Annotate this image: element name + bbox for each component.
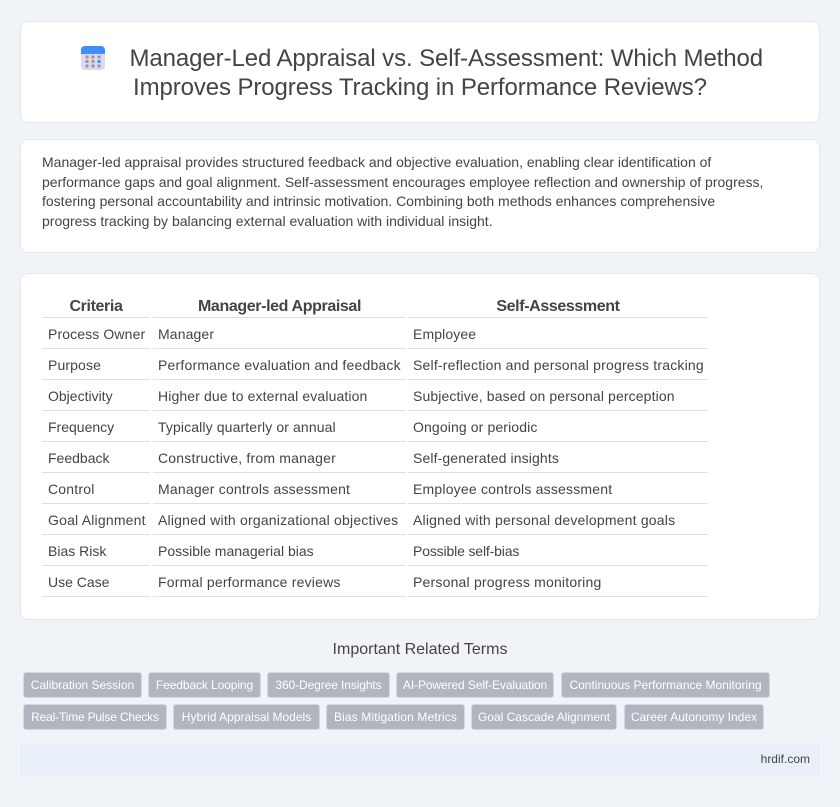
row: Control: Control (48, 481, 95, 497)
row: Purpose: Performance evaluation and feedback (158, 357, 401, 373)
footer bar (20, 743, 820, 777)
row: Objectivity: Subjective, based on personal perception (413, 388, 675, 404)
row: Objectivity: Objectivity (48, 388, 113, 404)
tag (23, 672, 142, 698)
table header: Self-Assessment (496, 298, 620, 315)
tag: Calibration Session (31, 678, 134, 692)
row: Process Owner: Employee (413, 326, 476, 342)
row: Goal Alignment: Goal Alignment (48, 512, 146, 528)
row: Frequency: Ongoing or periodic (413, 419, 537, 435)
row: Bias Risk: Bias Risk (48, 543, 106, 559)
row: Purpose: Self-reflection and personal progress tracking (413, 357, 704, 373)
summary paragraph: performance gaps and goal alignment. Self-assessment encourages employee reflection and ownership of progress, (42, 174, 763, 190)
row: Frequency: Typically quarterly or annual (158, 419, 336, 435)
row: Use Case: Use Case (48, 574, 109, 590)
tag (624, 704, 764, 730)
tag (148, 672, 261, 698)
row: Bias Risk: Possible managerial bias (158, 543, 314, 559)
row: Control: Employee controls assessment (413, 481, 612, 497)
title (130, 45, 763, 101)
row: Frequency: Frequency (48, 419, 114, 435)
tag (396, 672, 554, 698)
header card (20, 21, 820, 123)
tag (561, 672, 770, 698)
row: Feedback: Self-generated insights (413, 450, 559, 466)
row: Control (42, 481, 708, 504)
row: Purpose (42, 357, 708, 380)
summary paragraph: fostering personal accountability and intrinsic motivation. Combining both methods enhances comprehensive (42, 193, 715, 209)
tag: AI-Powered Self-Evaluation (403, 678, 547, 692)
row: Goal Alignment: Aligned with organizational objectives (158, 512, 398, 528)
row: Feedback (42, 450, 708, 473)
tag: Real-Time Pulse Checks (31, 710, 159, 724)
summary card (20, 139, 820, 253)
tag (326, 704, 465, 730)
icon: calendar (81, 46, 105, 70)
related terms heading: Important Related Terms (333, 641, 507, 658)
row: Goal Alignment: Aligned with personal development goals (413, 512, 675, 528)
row: Process Owner: Process Owner (48, 326, 145, 342)
row: Frequency (42, 419, 708, 442)
tag (173, 704, 320, 730)
row: Control: Manager controls assessment (158, 481, 350, 497)
tag (471, 704, 617, 730)
row: Goal Alignment (42, 512, 708, 535)
title: Manager-Led Appraisal vs. Self-Assessment: Which Method (130, 45, 763, 72)
row: Feedback: Feedback (48, 450, 109, 466)
row: Process Owner (42, 326, 708, 349)
tag: Career Autonomy Index (631, 710, 757, 724)
row: Feedback: Constructive, from manager (158, 450, 336, 466)
tag: Hybrid Appraisal Models (182, 710, 311, 724)
tag: Continuous Performance Monitoring (569, 678, 762, 692)
table header: Criteria (70, 298, 122, 315)
tag: Feedback Looping (156, 678, 253, 692)
row: Use Case: Personal progress monitoring (413, 574, 601, 590)
row: Use Case: Formal performance reviews (158, 574, 341, 590)
summary paragraph: Manager-led appraisal provides structured feedback and objective evaluation, enabling clear identification of (42, 154, 711, 170)
table header: Manager-led Appraisal (198, 298, 361, 315)
tag: Goal Cascade Alignment (478, 710, 610, 724)
row: Process Owner: Manager (158, 326, 214, 342)
row: Objectivity (42, 388, 708, 411)
footer source: hrdif.com (761, 752, 810, 766)
tag: Bias Mitigation Metrics (334, 710, 457, 724)
row: Use Case (42, 574, 708, 597)
row: Bias Risk (42, 543, 708, 566)
tag: 360-Degree Insights (275, 678, 382, 692)
tag (23, 704, 167, 730)
row: Purpose: Purpose (48, 357, 101, 373)
row: Bias Risk: Possible self-bias (413, 543, 519, 559)
comparison table card (20, 273, 820, 620)
table header (42, 298, 708, 318)
tag (267, 672, 390, 698)
row: Objectivity: Higher due to external evaluation (158, 388, 367, 404)
title: Improves Progress Tracking in Performance Reviews? (133, 74, 707, 101)
summary paragraph: progress tracking by balancing external evaluation with individual insight. (42, 212, 493, 228)
summary paragraph (42, 154, 763, 229)
related terms tags (23, 672, 770, 730)
